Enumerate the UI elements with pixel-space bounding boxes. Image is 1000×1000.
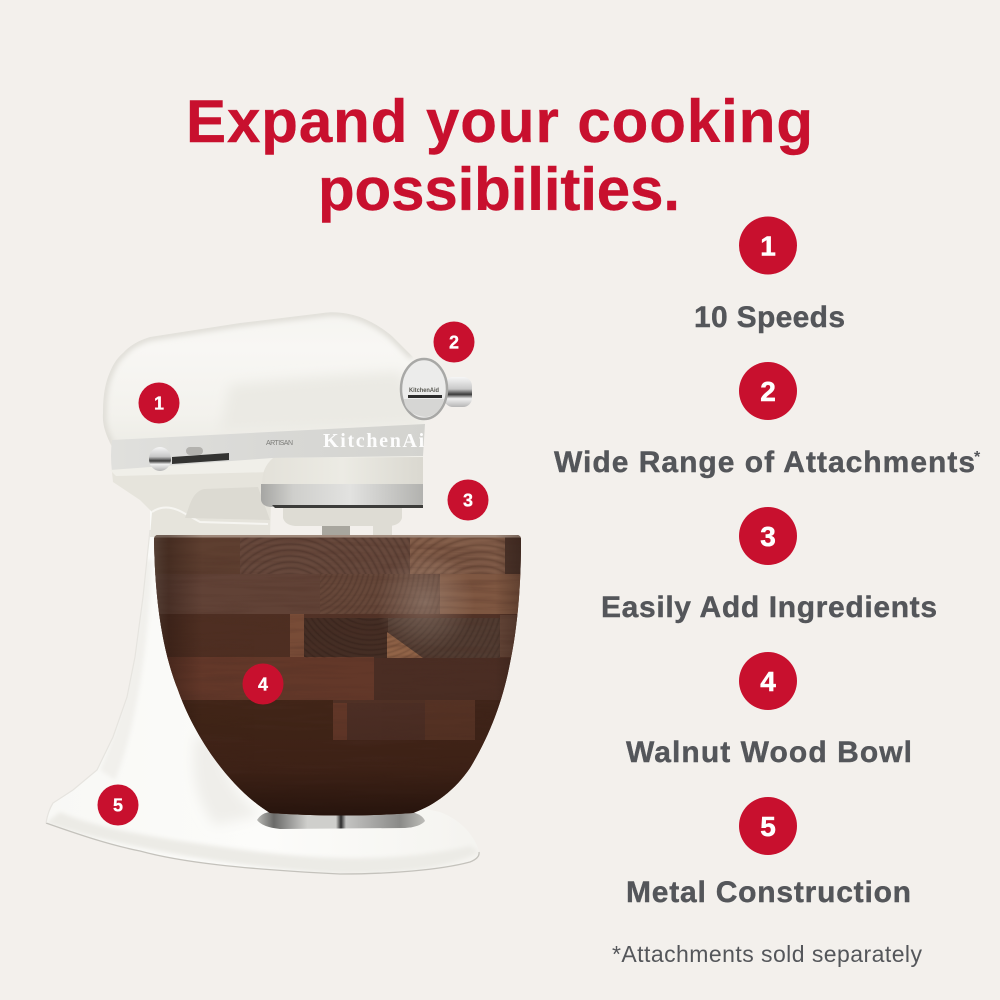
footnote: *Attachments sold separately bbox=[612, 941, 922, 967]
wood grain texture bbox=[290, 538, 516, 658]
feature 1: 10 Speeds bbox=[694, 216, 845, 334]
title: possibilities. bbox=[318, 156, 680, 223]
walnut bowl bbox=[150, 530, 525, 820]
feature 2: Wide Range of Attachments: * bbox=[974, 449, 981, 466]
feature 3: Easily Add Ingredients: 3 bbox=[760, 521, 776, 552]
feature 5: Metal Construction: 5 bbox=[760, 811, 776, 842]
white lip under band bbox=[110, 456, 423, 476]
feature 4: Walnut Wood Bowl: 4 bbox=[760, 666, 776, 697]
band logo text: KitchenAid bbox=[323, 430, 437, 452]
base edge line bbox=[46, 823, 479, 874]
head rim shading bbox=[103, 312, 413, 447]
marker 1: 1 bbox=[154, 394, 164, 414]
neck highlight bbox=[152, 508, 268, 524]
chrome ring bbox=[261, 484, 423, 507]
ring shadow bbox=[272, 505, 423, 508]
feature 4: Walnut Wood Bowl bbox=[626, 652, 912, 769]
marker 3: 3 bbox=[463, 490, 473, 510]
marker 2: 2 bbox=[449, 332, 459, 352]
stand back edge bbox=[46, 530, 150, 823]
light haze bbox=[385, 563, 464, 643]
speed control lever bbox=[149, 447, 229, 471]
rim highlight bbox=[150, 535, 525, 538]
markers on mixer bbox=[98, 322, 488, 826]
feature 3: Easily Add Ingredients: Easily Add Ingredients bbox=[601, 591, 937, 624]
feature 4: Walnut Wood Bowl: Walnut Wood Bowl bbox=[626, 736, 912, 769]
attachment hub bbox=[401, 359, 472, 419]
wood blocks bbox=[150, 535, 525, 820]
marker 4: 4 bbox=[258, 674, 268, 694]
beater shaft bbox=[283, 508, 402, 535]
marker 4 bbox=[242, 664, 284, 704]
feature 2: Wide Range of Attachments bbox=[554, 362, 981, 479]
lower head shading bbox=[230, 374, 410, 418]
feature 3: Easily Add Ingredients bbox=[601, 507, 937, 624]
feature 2: Wide Range of Attachments: 2 bbox=[760, 376, 776, 407]
feature 5: Metal Construction: Metal Construction bbox=[626, 876, 911, 909]
planetary collar bbox=[262, 457, 423, 485]
end-grain arcs bbox=[240, 535, 505, 658]
silver band bbox=[111, 424, 425, 472]
title: Expand your cooking bbox=[186, 88, 813, 155]
marker 3 bbox=[448, 480, 488, 520]
feature 2: Wide Range of Attachments: Wide Range of Attachments bbox=[554, 446, 975, 479]
model label: ARTISAN bbox=[266, 440, 293, 447]
motor head bbox=[103, 312, 412, 446]
mixer neck bbox=[112, 465, 272, 537]
feature 1: 10 Speeds: 1 bbox=[760, 230, 776, 262]
feature 1: 10 Speeds: 10 Speeds bbox=[694, 301, 845, 334]
feature 5: Metal Construction bbox=[626, 797, 911, 909]
pedestal recess bbox=[185, 487, 270, 520]
bowl base ring bbox=[257, 812, 425, 829]
marker 5: 5 bbox=[113, 796, 123, 816]
marker 1 bbox=[138, 382, 180, 424]
feature list bbox=[554, 216, 981, 909]
marker 2 bbox=[434, 322, 474, 362]
bowl shading bbox=[154, 535, 521, 705]
illustration: stand mixer bbox=[40, 305, 525, 880]
marker 5 bbox=[98, 784, 138, 826]
mixer stand and base bbox=[48, 510, 387, 868]
attachment hub: KitchenAid bbox=[409, 388, 439, 394]
title bbox=[186, 88, 813, 223]
